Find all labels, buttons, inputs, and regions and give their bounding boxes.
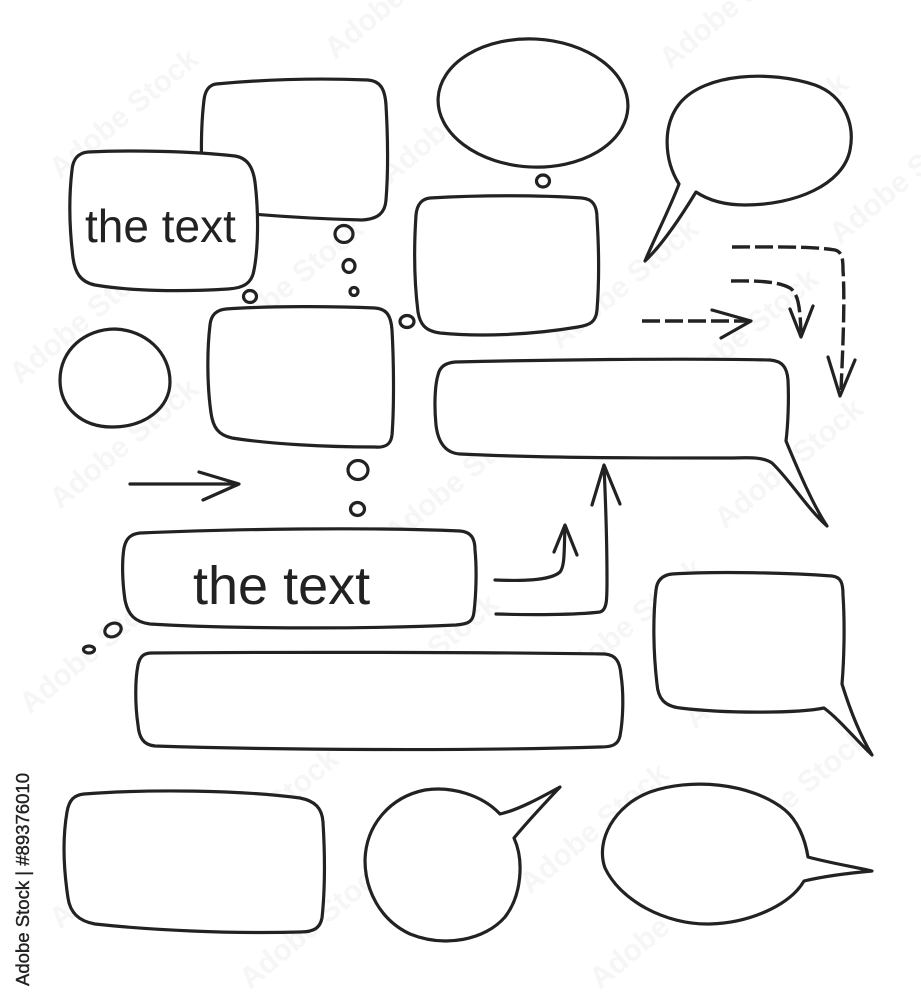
faint stock watermark: Adobe Stock bbox=[43, 792, 205, 935]
faint stock watermark: Adobe Stock bbox=[663, 262, 825, 405]
faint stock watermark: Adobe Stock bbox=[373, 47, 535, 190]
top right speech bubble bbox=[645, 76, 851, 261]
back rounded box bbox=[201, 79, 388, 220]
top ellipse bbox=[435, 34, 631, 172]
thought dots bbox=[244, 226, 414, 328]
box with the text lower bbox=[123, 529, 476, 628]
faint stock watermark: Adobe Stock bbox=[233, 852, 395, 995]
faint stock watermark: Adobe Stock bbox=[513, 757, 675, 900]
faint stock watermark: Adobe Stock bbox=[678, 592, 840, 735]
long box bbox=[136, 652, 623, 750]
faint stock watermark: Adobe Stock bbox=[713, 722, 875, 865]
bottom left box bbox=[64, 791, 324, 933]
box with the text: the text bbox=[85, 200, 236, 252]
wide speech bubble bbox=[435, 359, 827, 526]
faint stock watermark: Adobe Stock bbox=[543, 212, 705, 355]
box with the text lower: the text bbox=[193, 556, 370, 616]
faint stock watermark: Adobe Stock bbox=[13, 577, 175, 720]
stock id side text: Adobe Stock | #89376010 bbox=[13, 773, 33, 986]
dashed arrows bbox=[642, 247, 855, 396]
faint stock watermark: Adobe Stock bbox=[583, 852, 745, 995]
thought dots left bbox=[84, 621, 123, 653]
faint stock watermark: Adobe Stock bbox=[43, 42, 205, 185]
faint stock watermark: Adobe Stock bbox=[378, 407, 540, 550]
right speech box bbox=[654, 573, 872, 755]
faint stock watermark: Adobe Stock bbox=[548, 552, 710, 695]
faint stock watermark: Adobe Stock bbox=[43, 372, 205, 515]
bottom ellipse speech bubble bbox=[602, 784, 872, 924]
box with the text bbox=[70, 151, 258, 291]
thought dot bbox=[536, 175, 550, 187]
faint stock watermark: Adobe Stock bbox=[708, 392, 870, 535]
faint stock watermark: Adobe Stock bbox=[3, 247, 165, 390]
centre box bbox=[208, 307, 394, 447]
thought dots lower bbox=[348, 460, 368, 516]
faint stock watermark: Adobe Stock bbox=[693, 67, 855, 210]
faint stock watermark: Adobe Stock bbox=[183, 742, 345, 885]
solid arrow bbox=[130, 472, 239, 500]
left circle bbox=[60, 329, 170, 427]
bottom circle speech bubble bbox=[365, 787, 560, 941]
faint stock watermark: Adobe Stock bbox=[208, 212, 370, 355]
faint stock watermark: Adobe Stock bbox=[343, 587, 505, 730]
upper middle box bbox=[415, 196, 598, 335]
curved arrows bbox=[495, 465, 620, 615]
